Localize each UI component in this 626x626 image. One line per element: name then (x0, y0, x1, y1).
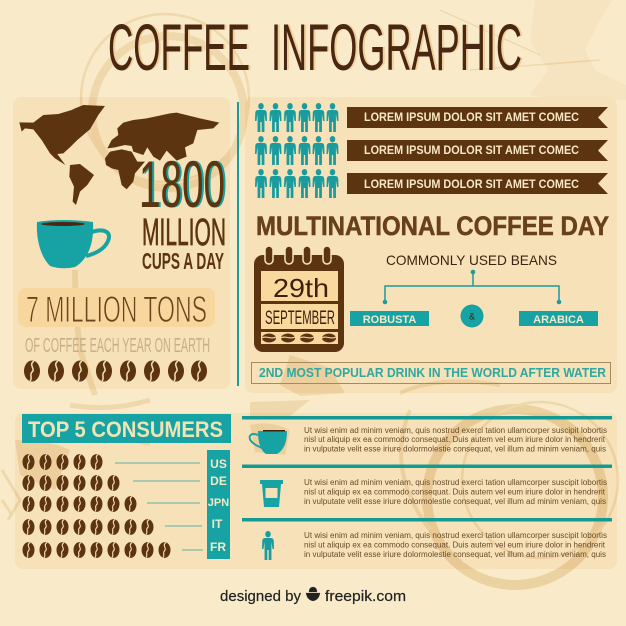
footer credit: designed by (220, 588, 301, 605)
text block 2: nisl ut aliquip ex ea commodo consequat. Duis autem vel eum iriure dolor in hendrerit (304, 488, 606, 496)
calendar: 29th September: 29th (273, 273, 329, 303)
text block 1: Ut wisi enim ad minim veniam, quis nostrud exerci tation ullamcorper suscipit lobortis (304, 426, 607, 435)
ribbon banners: LOREM IPSUM DOLOR SIT AMET COMEC (364, 179, 579, 191)
text block 3: Ut wisi enim ad minim veniam, quis nostrud exerci tation ullamcorper suscipit lobortis (304, 531, 607, 540)
bean row (24, 360, 207, 382)
title: COFFEE (110, 10, 252, 84)
bean type tree diagram (350, 270, 598, 328)
callout: 2nd most popular drink (252, 362, 610, 384)
panel: bottom consumers and details (15, 413, 617, 569)
bean type tree diagram: & (469, 312, 475, 322)
divider (237, 102, 239, 386)
text block 2 (304, 478, 607, 506)
country labels column: JPN (208, 497, 229, 509)
panel: coffee day (245, 97, 617, 393)
bean type tree diagram: ARABICA (533, 314, 584, 326)
header: top 5 consumers: TOP 5 CONSUMERS (28, 417, 223, 442)
heading: commonly used beans: COMMONLY USED BEANS (386, 252, 557, 268)
1800 million cups a day (139, 147, 227, 274)
people pictogram (255, 103, 338, 198)
text block 3: in vulputate velit esse iriure dolormolestie consequat, vel illum ad minim veniam, quis (304, 550, 606, 559)
bean type tree diagram: ROBUSTA (363, 314, 416, 326)
icon: small cup (250, 430, 287, 454)
country labels column: FR (210, 540, 226, 554)
callout: 7 million tons: 7 MILLION TONS (26, 289, 207, 330)
callout: 2nd most popular drink: 2ND MOST POPULAR DRINK IN THE WORLD AFTER WATER (259, 365, 607, 380)
icon: takeaway cup (260, 480, 283, 507)
1800 million cups a day: 1800 (139, 147, 225, 221)
title: COFFEE (108, 10, 250, 84)
text block 2: in vulputate velit esse iriure dolormolestie consequat, vel illum ad minim veniam, quis (304, 497, 606, 506)
callout: 7 million tons (18, 288, 215, 330)
1800 million cups a day: MILLION (142, 212, 226, 254)
world map (19, 105, 219, 205)
calendar: 29th September (254, 246, 344, 352)
ribbon banners: LOREM IPSUM DOLOR SIT AMET COMEC (364, 145, 579, 157)
1800 million cups a day: 1800 (141, 147, 227, 221)
text block 1: in vulputate velit esse iriure dolormolestie consequat, vel illum ad minim veniam, quis (304, 444, 606, 454)
text: of coffee each year: OF COFFEE EACH YEAR ON EARTH (25, 335, 210, 357)
text block 1: nisl ut aliquip ex ea commodo consequat. Duis autem vel eum iriure dolor in hendrerit (304, 435, 606, 444)
bean rows chart (22, 454, 203, 558)
country labels column (207, 450, 230, 559)
teal separators (242, 416, 612, 522)
text block 1 (304, 426, 607, 454)
ribbon banners: LOREM IPSUM DOLOR SIT AMET COMEC (364, 112, 579, 124)
ribbon banners (347, 107, 608, 194)
footer credit (220, 587, 406, 605)
footer credit: freepik.com (325, 588, 406, 605)
text block 3: nisl ut aliquip ex ea commodo consequat. Duis autem vel eum iriure dolor in hendrerit (304, 540, 606, 550)
country labels column: DE (210, 474, 227, 488)
country labels column: US (210, 457, 227, 471)
panel: world stats (13, 97, 230, 389)
country labels column: IT (212, 517, 223, 531)
icon: person (262, 531, 274, 560)
title (108, 10, 524, 84)
icon: teal coffee cup (37, 220, 109, 268)
background: top right stain (530, 0, 626, 100)
text block 3 (304, 531, 607, 559)
1800 million cups a day: CUPS A DAY (142, 248, 224, 274)
text block 2: Ut wisi enim ad minim veniam, quis nostrud exerci tation ullamcorper suscipit lobortis (304, 478, 607, 487)
calendar: 29th September: SEPTEMBER (265, 308, 335, 329)
